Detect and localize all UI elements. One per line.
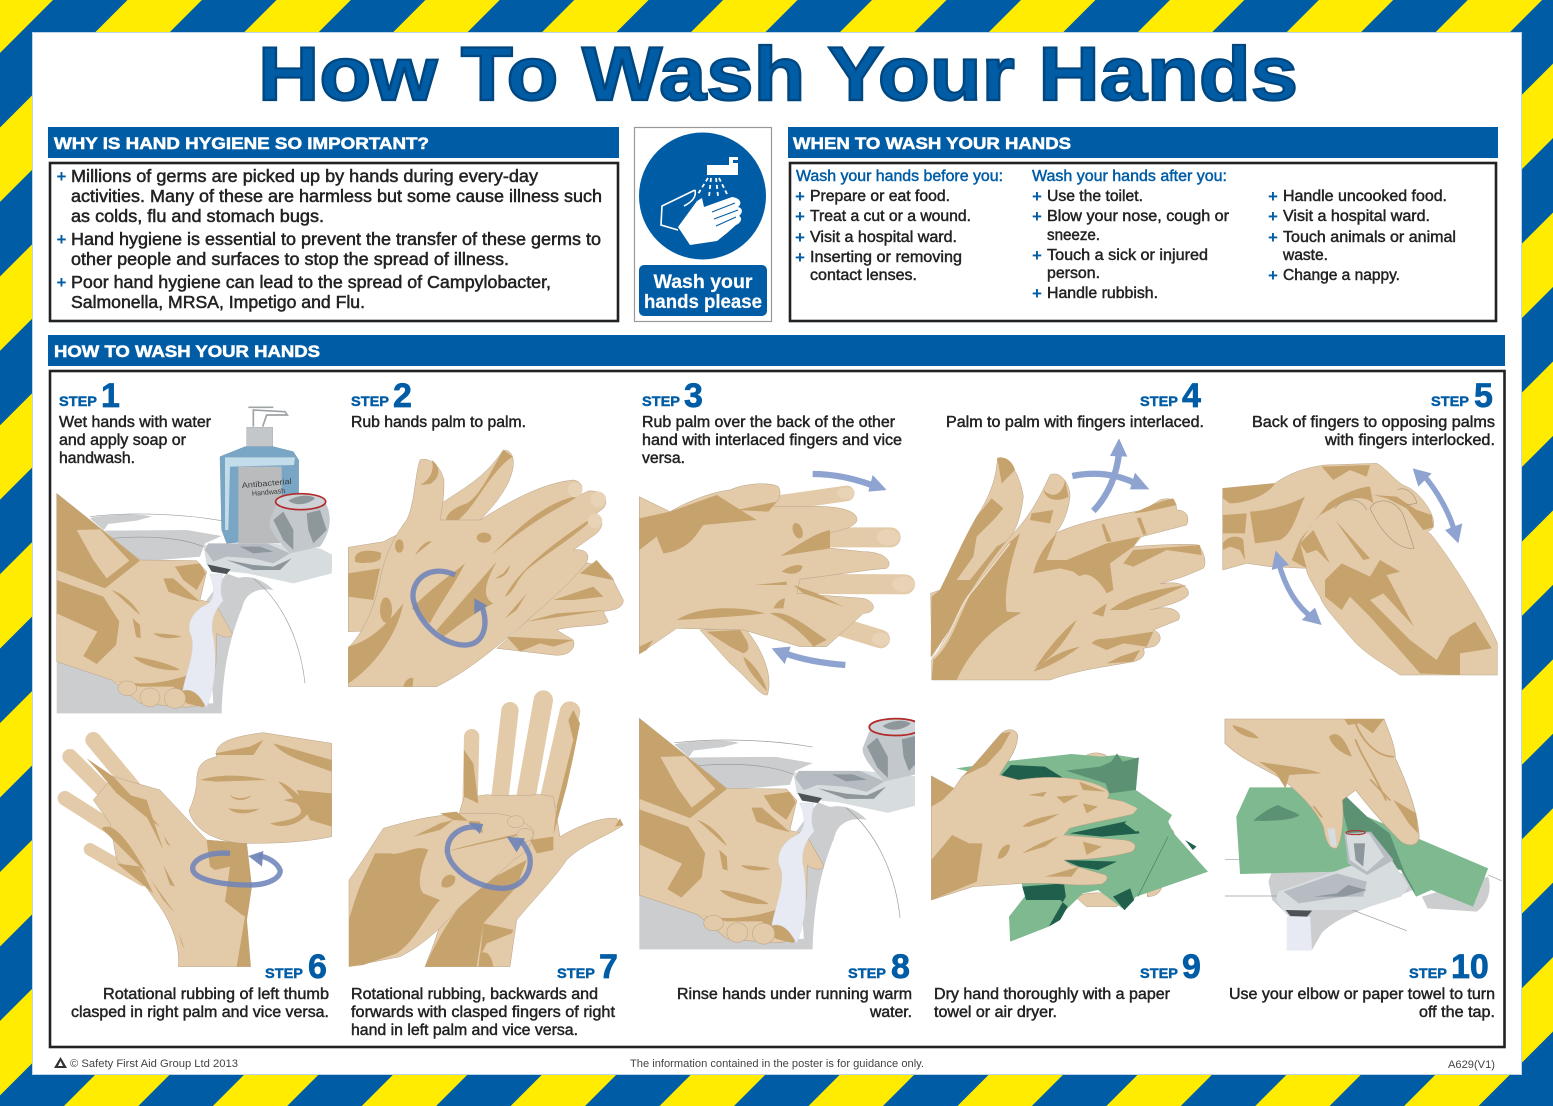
step 8 label xyxy=(848,948,910,986)
step 10 text xyxy=(1229,986,1495,1021)
arrow: top sweep xyxy=(813,474,887,492)
step 7 xyxy=(349,700,623,1039)
step 8 label: STEP xyxy=(848,966,886,981)
copyright: © Safety First Aid Group Ltd 2013 xyxy=(70,1058,238,1070)
step 9 xyxy=(931,730,1208,1021)
heading bar: how to wash your hands: HOW TO WASH YOUR HANDS xyxy=(54,343,320,361)
text box: before and after lists: Touch animals or animal xyxy=(1283,229,1456,246)
text box: before and after lists: Change a nappy. xyxy=(1283,267,1400,284)
text box: hygiene bullets xyxy=(50,163,618,321)
text box: before and after lists xyxy=(790,163,1496,321)
text box: before and after lists: Inserting or removing xyxy=(810,249,962,266)
step 6 text: clasped in right palm and vice versa. xyxy=(71,1004,329,1021)
step 9 label: STEP xyxy=(1140,966,1178,981)
step 9 text xyxy=(934,986,1170,1021)
text box: before and after lists: Touch a sick or injured xyxy=(1047,247,1208,264)
heading bar: why hand hygiene matters xyxy=(48,127,619,158)
product code: A629(V1) xyxy=(1448,1059,1495,1071)
text box: before and after lists: + xyxy=(1268,266,1278,285)
heading bar: when to wash: WHEN TO WASH YOUR HANDS xyxy=(793,135,1071,153)
step 6 label xyxy=(265,948,327,986)
step 9 text: Dry hand thoroughly with a paper xyxy=(934,986,1170,1003)
step 1 label: 1 xyxy=(101,377,120,415)
text box: before and after lists: Use the toilet. xyxy=(1047,188,1143,205)
icon: soap bottle xyxy=(220,407,299,543)
text box: before and after lists: Prepare or eat food. xyxy=(810,188,950,205)
step 2 text: Rub hands palm to palm. xyxy=(351,414,526,431)
text box: before and after lists: Blow your nose, cough or xyxy=(1047,208,1229,225)
panel: ten steps frame xyxy=(50,371,1504,1047)
panel: when to wash your hands xyxy=(788,127,1498,321)
panel: why is hand hygiene so important xyxy=(48,127,619,321)
text box: hygiene bullets: activities. Many of these are harmless but some cause illness such xyxy=(71,186,602,206)
step 6 label: STEP xyxy=(265,966,303,981)
step 2 label: STEP xyxy=(351,394,389,409)
step 3 label xyxy=(642,377,703,415)
step 8 label: 8 xyxy=(891,948,910,986)
step 8 text: Rinse hands under running warm xyxy=(677,986,912,1003)
step 6 xyxy=(65,733,332,1021)
step 7 text xyxy=(351,986,616,1039)
step 2 xyxy=(348,377,623,687)
step 3 text xyxy=(642,414,902,467)
arrow: rotational xyxy=(193,851,280,885)
step 1 xyxy=(57,377,333,713)
step 7 label xyxy=(557,948,618,986)
text box: hygiene bullets: as colds, flu and stomach bugs. xyxy=(71,206,324,226)
step 3 xyxy=(639,377,914,695)
step 1 text: and apply soap or xyxy=(59,432,186,449)
text box: before and after lists: + xyxy=(1268,228,1278,247)
text box: hygiene bullets: Poor hand hygiene can lead to the spread of Campylobacter, xyxy=(71,272,551,292)
illustration: rotational rubbing of thumb xyxy=(65,733,332,967)
step 5 text xyxy=(1252,414,1495,449)
step 10 label xyxy=(1409,948,1489,986)
text box: before and after lists: Visit a hospital ward. xyxy=(810,229,957,246)
step 1 label xyxy=(59,377,120,415)
text box: before and after lists: + xyxy=(795,248,805,267)
illustration: hands palm to palm with circular arrow xyxy=(348,450,623,687)
illustration: hand under tap with soap bottle xyxy=(57,407,333,713)
step 1 text: handwash. xyxy=(59,450,135,467)
text box: before and after lists: + xyxy=(795,207,805,226)
text box: hygiene bullets: + xyxy=(56,273,66,292)
illustration: rotational rubbing of fingers in palm xyxy=(349,700,623,967)
step 3 text: Rub palm over the back of the other xyxy=(642,414,895,431)
text box: before and after lists: + xyxy=(1032,246,1042,265)
illustration: drying hand with paper towel xyxy=(931,730,1208,942)
text box: hygiene bullets: Hand hygiene is essential to prevent the transfer of these germs to xyxy=(71,229,601,249)
illustration: interlaced fingers over back of hand xyxy=(639,474,914,695)
step 5 label: STEP xyxy=(1431,394,1469,409)
text box: hygiene bullets: Salmonella, MRSA, Impetigo and Flu. xyxy=(71,292,365,312)
step 5 label xyxy=(1431,377,1493,415)
step 9 text: towel or air dryer. xyxy=(934,1004,1057,1021)
text box: before and after lists: contact lenses. xyxy=(810,267,917,284)
sign: wash your hands please xyxy=(634,128,772,322)
heading bar: why hand hygiene matters: WHY IS HAND HYGIENE SO IMPORTANT? xyxy=(54,135,429,153)
step 4 xyxy=(931,377,1205,680)
step 10 label: 10 xyxy=(1451,948,1489,986)
step 10 xyxy=(1225,719,1501,1021)
text box: before and after lists: + xyxy=(1032,187,1042,206)
step 5 label: 5 xyxy=(1474,377,1493,415)
step 1 label: STEP xyxy=(59,394,97,409)
step 4 label: STEP xyxy=(1140,394,1178,409)
step 1 text xyxy=(59,414,211,467)
arrow: bottom sweep xyxy=(772,647,845,665)
sign label xyxy=(639,265,767,316)
step 5 text: Back of fingers to opposing palms xyxy=(1252,414,1495,431)
step 6 label: 6 xyxy=(308,948,327,986)
text box: before and after lists: Handle rubbish. xyxy=(1047,285,1158,302)
step 8 text: water. xyxy=(869,1004,912,1021)
text box: before and after lists: + xyxy=(1032,207,1042,226)
step 2 label: 2 xyxy=(393,377,412,415)
illustration: rinsing hands under tap xyxy=(639,718,929,949)
step 5 text: with fingers interlocked. xyxy=(1324,432,1495,449)
step 1 text: Wet hands with water xyxy=(59,414,211,431)
step 9 label xyxy=(1140,948,1201,986)
text box: before and after lists: + xyxy=(795,187,805,206)
footer xyxy=(54,1057,1495,1071)
step 7 text: hand in left palm and vice versa. xyxy=(351,1022,578,1039)
step 4 label xyxy=(1140,377,1201,415)
text box: before and after lists: + xyxy=(1268,187,1278,206)
step 4 label: 4 xyxy=(1182,377,1201,415)
step 8 text xyxy=(677,986,912,1021)
illustration: back of fingers to opposing palms xyxy=(1223,463,1497,675)
text box: before and after lists: person. xyxy=(1047,265,1100,282)
text box: before and after lists: + xyxy=(1268,207,1278,226)
illustration: palm to palm with interlaced fingers xyxy=(931,438,1205,680)
text box: hygiene bullets: other people and surfaces to stop the spread of illness. xyxy=(71,249,509,269)
step 6 text xyxy=(71,986,329,1021)
step 10 text: Use your elbow or paper towel to turn xyxy=(1229,986,1495,1003)
icon: soap bottle: Antibacterial xyxy=(241,477,292,490)
title: How To Wash Your Hands xyxy=(258,32,1298,117)
step 6 text: Rotational rubbing of left thumb xyxy=(103,986,329,1003)
heading bar: when to wash xyxy=(788,127,1498,158)
heading bar: how to wash your hands xyxy=(48,335,1505,366)
step 10 label: STEP xyxy=(1409,966,1447,981)
arrow: rotational xyxy=(447,823,530,888)
step 8 xyxy=(639,718,929,1021)
text box: before and after lists: Visit a hospital ward. xyxy=(1283,208,1430,225)
text box: before and after lists: sneeze. xyxy=(1047,227,1100,244)
text box: before and after lists: Wash your hands after you: xyxy=(1032,168,1227,185)
step 5 xyxy=(1223,377,1497,675)
icon: tap and washing hands xyxy=(661,157,742,245)
step 3 text: versa. xyxy=(642,450,685,467)
text box: before and after lists: + xyxy=(795,228,805,247)
text box: before and after lists: Wash your hands before you: xyxy=(796,168,1003,185)
text box: before and after lists: + xyxy=(1032,284,1042,303)
step 7 label: 7 xyxy=(599,948,618,986)
text box: before and after lists: Treat a cut or a wound. xyxy=(810,208,971,225)
icon: soap bottle: Handwash xyxy=(252,486,286,498)
text box: hygiene bullets: + xyxy=(56,230,66,249)
text box: before and after lists: Handle uncooked food. xyxy=(1283,188,1447,205)
text box: before and after lists: waste. xyxy=(1282,247,1328,264)
step 7 label: STEP xyxy=(557,966,595,981)
illustration: turning off tap with towel xyxy=(1225,719,1501,951)
step 7 text: forwards with clasped fingers of right xyxy=(351,1004,616,1021)
disclaimer: The information contained in the poster is for guidance only. xyxy=(630,1058,924,1070)
step 3 label: STEP xyxy=(642,394,680,409)
step 3 text: hand with interlaced fingers and vice xyxy=(642,432,902,449)
arrow: crossing motion xyxy=(1072,438,1149,511)
step 10 text: off the tap. xyxy=(1419,1004,1495,1021)
step 7 text: Rotational rubbing, backwards and xyxy=(351,986,598,1003)
icon: safety first aid logo xyxy=(54,1057,67,1068)
arrow: lower double headed xyxy=(1272,551,1322,625)
sign label: hands please xyxy=(644,291,762,313)
arrow: rotational xyxy=(413,571,487,645)
text box: hygiene bullets: + xyxy=(56,167,66,186)
step 3 label: 3 xyxy=(684,377,703,415)
step 9 label: 9 xyxy=(1182,948,1201,986)
arrow: upper double headed xyxy=(1413,468,1462,543)
step 4 text: Palm to palm with fingers interlaced. xyxy=(946,414,1204,431)
sign label: Wash your xyxy=(654,271,753,293)
step 2 label xyxy=(351,377,412,415)
text box: hygiene bullets: Millions of germs are picked up by hands during every-day xyxy=(71,166,538,186)
